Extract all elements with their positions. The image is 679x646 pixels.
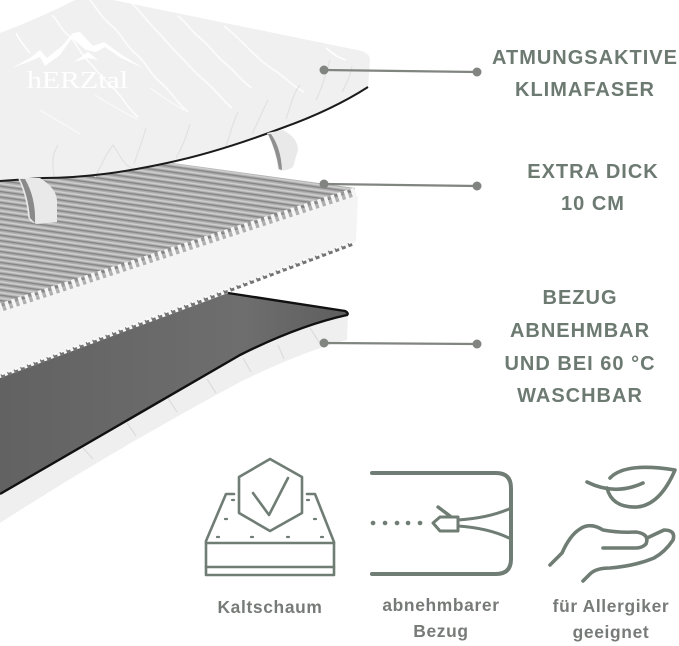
icon: leaf above hand — [550, 467, 675, 581]
label: abnehmbarer Bezug: abnehmbarer — [382, 595, 500, 615]
dark underside — [0, 293, 348, 494]
mattress body — [0, 0, 370, 181]
heading: Extra dick 10 cm: 10 CM — [561, 193, 625, 215]
icon: Kaltschaum foam block with check — [206, 459, 334, 575]
heading: Atmungsaktive Klimafaser: ATMUNGSAKTIVE — [492, 47, 678, 69]
label: abnehmbarer Bezug — [382, 595, 500, 641]
heading: Atmungsaktive Klimafaser: KLIMAFASER — [515, 79, 655, 101]
heading: Bezug abnehmbar: ABNEHMBAR — [510, 320, 650, 342]
callout line: Extra dick — [320, 180, 482, 190]
icon: removable cover zipper — [372, 473, 511, 574]
heading: Bezug abnehmbar: WASCHBAR — [517, 385, 643, 407]
heading: Extra dick 10 cm — [527, 161, 659, 215]
heading: Bezug abnehmbar — [504, 287, 656, 407]
foam ribbed top — [0, 163, 355, 307]
bottom mattress cover layer — [0, 293, 348, 523]
label: für Allergiker geeignet: für Allergiker — [553, 596, 669, 616]
black piping — [0, 87, 368, 181]
top mattress — [0, 0, 370, 224]
quilting pattern — [52, 0, 304, 117]
label: für Allergiker geeignet — [553, 596, 669, 642]
label: Kaltschaum: Kaltschaum — [217, 597, 323, 617]
label: für Allergiker geeignet: geeignet — [573, 622, 649, 642]
serrated upper edge — [0, 192, 355, 308]
middle foam layer — [0, 163, 358, 377]
leaf — [587, 467, 675, 507]
strap left — [18, 178, 57, 224]
heading: Bezug abnehmbar: UND BEI 60 °C — [504, 353, 656, 375]
label: abnehmbarer Bezug: Bezug — [413, 621, 469, 641]
hand — [550, 526, 674, 581]
callout line: Klimafaser — [320, 66, 482, 76]
heading: Atmungsaktive Klimafaser — [492, 47, 678, 101]
cover edge — [0, 314, 348, 523]
serrated lower edge — [0, 244, 352, 377]
logo wordmark: hERZtal — [27, 68, 128, 94]
logo — [12, 32, 143, 94]
heading: Extra dick 10 cm: EXTRA DICK — [527, 161, 659, 183]
callout line: Bezug — [320, 338, 482, 348]
heading: Bezug abnehmbar: BEZUG — [542, 287, 618, 309]
strap right — [267, 130, 298, 171]
foam white side — [0, 193, 358, 377]
